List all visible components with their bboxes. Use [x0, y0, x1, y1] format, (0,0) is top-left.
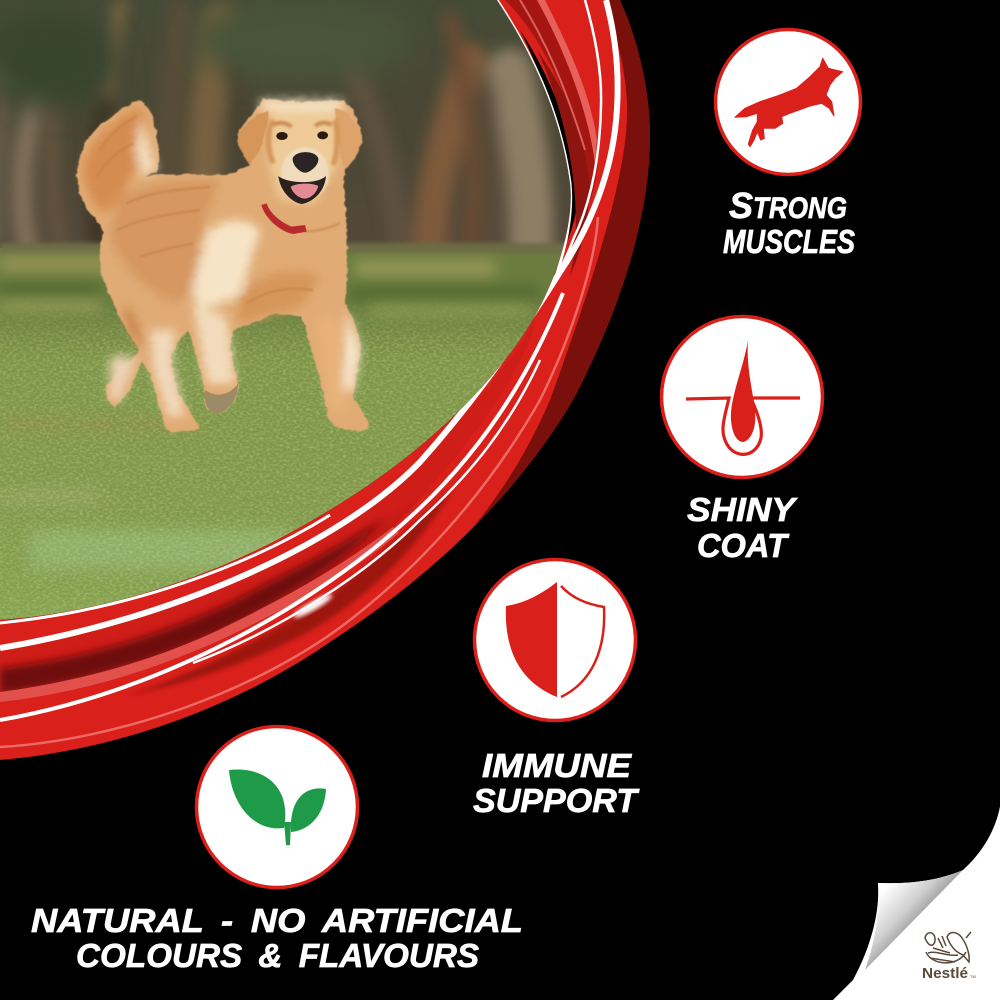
dark gradient lower band: [0, 320, 535, 693]
nose: [293, 152, 318, 173]
paw: [205, 383, 238, 413]
ears: [238, 110, 268, 164]
collar: [261, 203, 307, 234]
dark outer band: [472, 0, 650, 528]
eyes: [276, 132, 288, 140]
secondary white line: [561, 0, 602, 265]
pink stripe: [0, 527, 399, 702]
pink band edge: [537, 0, 597, 165]
black shadow at inner edge: [520, 30, 577, 240]
main white line: [0, 0, 618, 648]
tongue: [291, 184, 318, 199]
label: shiny: SHINY: [687, 491, 798, 528]
icon: hair follicle: [662, 316, 822, 478]
label: natural, no artificial: NATURAL - NO ARTIFICIAL: [31, 902, 523, 939]
label: immune: IMMUNE: [482, 747, 632, 784]
feature: strong muscles: [716, 30, 860, 260]
red swoosh band: [0, 0, 700, 770]
label: coat: COAT: [697, 527, 790, 564]
dog body: [77, 98, 370, 432]
photo: golden retriever: [77, 98, 370, 432]
label: support: SUPPORT: [473, 782, 640, 819]
swoosh base: [0, 0, 660, 770]
fur shading: [83, 100, 360, 417]
feature: shiny coat: [662, 316, 822, 564]
logo: Nestlé: [922, 932, 976, 982]
face shading: [268, 120, 337, 165]
label: trong: TRONG: [753, 192, 847, 225]
faint upper stripe: [520, 0, 585, 150]
trademark: TM: [970, 974, 976, 979]
fur streaks: [97, 117, 340, 303]
icon: running dog: [716, 30, 860, 174]
thin pink stripe: [0, 217, 598, 747]
mouth: [278, 176, 326, 204]
sparkle: [292, 592, 334, 620]
curl shadow: [865, 870, 963, 970]
second lower white line: [193, 360, 540, 663]
white corner: [832, 800, 1000, 1000]
icon: green leaves: [196, 726, 358, 888]
lower white line: [0, 293, 563, 720]
logo: nest and birds: [925, 932, 971, 963]
label: colours and flavours: COLOURS & FLAVOURS: [76, 937, 479, 974]
icon: shield: [474, 560, 636, 720]
lower shaded band: [130, 490, 452, 695]
photo: park background: [0, 0, 600, 630]
thin edge white line: [0, 515, 330, 623]
page curl corner: [832, 800, 1000, 1000]
dark shadow by bright band: [537, 50, 590, 275]
muzzle: [281, 147, 329, 199]
feature: immune support: [473, 560, 640, 819]
label: muscles: MUSCLES: [723, 223, 855, 260]
upper dark band: [505, 0, 598, 205]
feature: natural: [31, 726, 523, 974]
thin inner white line: [497, 0, 571, 280]
logo wordmark: Nestlé: [922, 966, 968, 982]
dark shading above pink stripe: [0, 518, 385, 694]
label: strong: S: [729, 185, 753, 226]
